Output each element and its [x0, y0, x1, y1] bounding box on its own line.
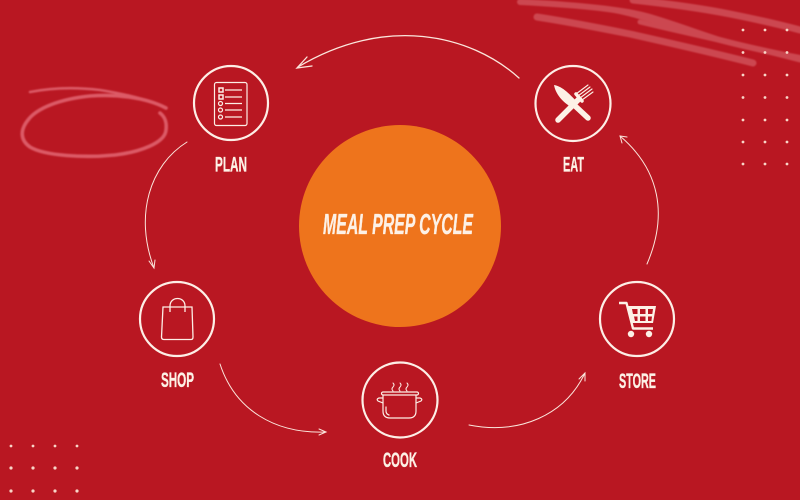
- label: shop: SHOP: [161, 369, 194, 392]
- icon: crossed knife and fork: [554, 85, 593, 120]
- icon: checklist: [214, 82, 247, 126]
- step: store: [600, 282, 674, 393]
- arrow: cook to store: [469, 373, 585, 428]
- arrow: plan to shop: [145, 142, 187, 268]
- icon: shopping cart: [619, 303, 656, 337]
- arrow: shop to cook: [220, 364, 326, 435]
- title: MEAL PREP CYCLE: [323, 209, 474, 241]
- decorative brush strokes top right: [520, 0, 800, 63]
- arrow: store to eat: [620, 136, 658, 264]
- dot grid top right: [742, 29, 788, 165]
- icon: steaming pot: [377, 383, 422, 418]
- step: eat: [536, 66, 610, 176]
- icon: shopping bag: [162, 298, 193, 340]
- step: plan: [194, 66, 268, 176]
- step: cook: [362, 362, 438, 472]
- center circle with title: [299, 125, 501, 327]
- label: eat: EAT: [563, 154, 584, 176]
- label: plan: PLAN: [215, 154, 247, 176]
- label: cook: COOK: [383, 449, 417, 472]
- dot grid bottom left: [9, 445, 79, 493]
- step: shop: [140, 282, 214, 392]
- label: store: STORE: [619, 370, 656, 393]
- decorative hand-drawn ellipse: [22, 88, 166, 156]
- arrow: eat to plan: [297, 36, 519, 78]
